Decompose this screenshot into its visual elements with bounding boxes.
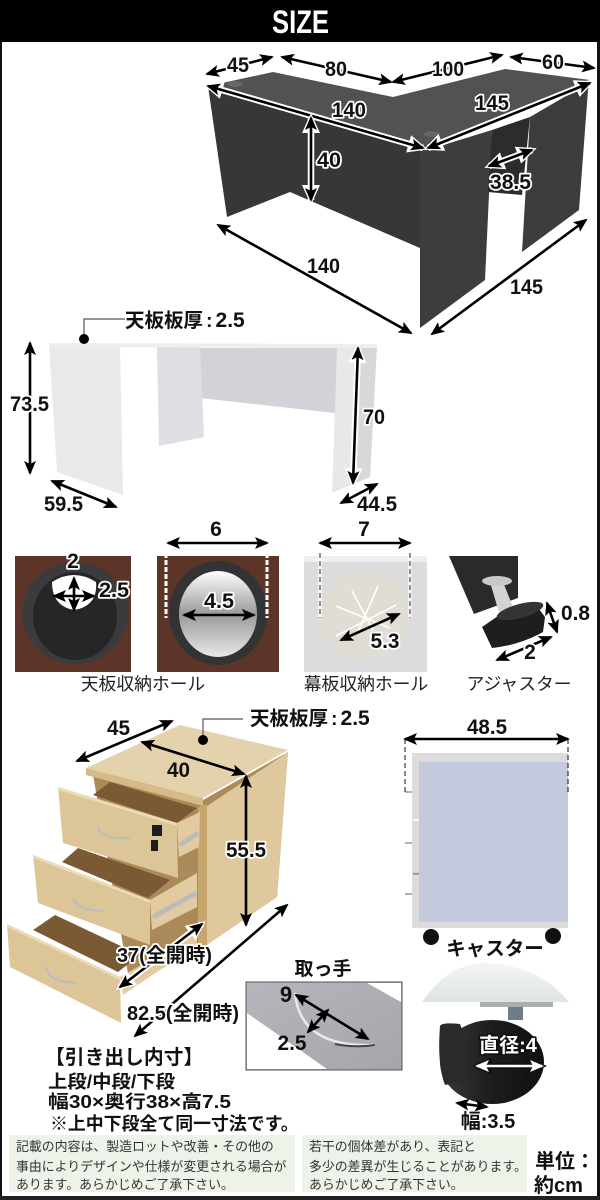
label: caster width 3.5: 幅:3.5 xyxy=(461,1110,515,1133)
dimension: modesty height 40: 40 xyxy=(317,149,341,172)
photo: cable grommet open xyxy=(157,518,279,672)
photo: adjuster foot xyxy=(449,556,590,664)
note: specification changes xyxy=(9,1135,295,1192)
washer and bolt xyxy=(490,582,515,616)
text block: drawer inner dimensions: 幅30×奥行38×高7.5 xyxy=(48,1092,231,1112)
callout: cabinet top thickness 2.5: 天板板厚:2.5 xyxy=(250,707,370,730)
dimension cross 2 and 2.5: 2.5 xyxy=(99,579,129,602)
desk front and legs xyxy=(208,82,590,328)
dimension: desk 100 xyxy=(393,55,502,82)
note: individual differences: 多少の差異が生じることがあります。 xyxy=(309,1159,527,1174)
desk top surface xyxy=(208,69,590,150)
dimension depth 2.5 xyxy=(278,1010,328,1055)
dimension: 44.5 xyxy=(341,484,397,516)
callout: desktop thickness 2.5 xyxy=(79,309,245,344)
drawer 2 xyxy=(33,848,197,945)
note: individual differences: あらかじめご了承下さい。 xyxy=(309,1177,464,1192)
lock lever xyxy=(439,1023,470,1085)
dimension: floor 145 xyxy=(432,220,586,334)
dimension width 7: 7 xyxy=(358,518,370,541)
dimension length 9: 9 xyxy=(280,982,292,1007)
panel: handle detail xyxy=(246,982,402,1070)
cabinet body xyxy=(93,752,288,985)
note: specification changes: 記載の内容は、製造ロットや改善・その他の xyxy=(16,1139,274,1154)
dimension: desk 60 xyxy=(511,51,594,74)
dimension diameter 4: 直径:4 xyxy=(479,1034,538,1057)
drawer 1 xyxy=(58,782,200,878)
dimension: inner height 70: 70 xyxy=(363,406,385,429)
foot pad xyxy=(482,605,545,648)
title bar: SIZE xyxy=(0,0,600,42)
text block: drawer inner dimensions: 上段/中段/下段 xyxy=(48,1072,175,1092)
panel: dark L-shaped desk xyxy=(208,69,590,328)
dimension: cabinet 45: 45 xyxy=(107,717,130,740)
dimension: 37 fully open: 37(全開時) xyxy=(117,944,212,967)
dimension width 7 xyxy=(320,518,410,618)
dimension width arrow xyxy=(457,1103,487,1107)
notch opening xyxy=(52,575,96,610)
dimension length 9 xyxy=(280,982,368,1039)
dimension: gap 38.5: 38.5 xyxy=(490,171,531,194)
slit lines xyxy=(336,586,396,636)
callout: desktop thickness 2.5: 天板板厚:2.5 xyxy=(125,309,245,332)
dimension hole 5.3: 5.3 xyxy=(370,630,400,653)
dimension depth 2.5: 2.5 xyxy=(278,1032,307,1055)
panel: white desk side view xyxy=(49,343,377,495)
note: specification changes: 事由によりデザインや仕様が変更される場合が xyxy=(16,1159,287,1174)
note: individual differences xyxy=(302,1135,527,1192)
dimension: floor 140: 140 xyxy=(307,255,340,278)
dimension: top edge 145: 145 xyxy=(475,92,509,115)
dimension: leg depth 59.5 xyxy=(44,481,116,516)
dimension: top edge 145 xyxy=(428,83,590,148)
note: individual differences: 若干の個体差があり、表記と xyxy=(309,1139,476,1154)
dimension: floor 140 xyxy=(218,225,411,333)
dimension: leg depth 59.5: 59.5 xyxy=(44,493,83,516)
label: adjuster: アジャスター xyxy=(466,674,572,694)
dimension 2: 2 xyxy=(524,641,536,664)
text block: drawer inner dimensions: ※上中下段全て同一寸法です。 xyxy=(50,1114,299,1134)
cable hole on top, left xyxy=(227,81,243,87)
label: modesty panel grommet: 幕板収納ホール xyxy=(304,674,428,694)
dimension width 6 xyxy=(166,518,267,618)
dimension: cabinet 40: 40 xyxy=(167,759,190,782)
photo: cable grommet closed xyxy=(15,550,131,672)
dimension width 6: 6 xyxy=(210,518,222,541)
dimension cross 2 and 2.5: 2 xyxy=(67,550,79,573)
cable hole on top, right xyxy=(424,131,440,137)
photo: caster xyxy=(422,963,569,1107)
dimension: cabinet 45 xyxy=(77,717,172,761)
dimension: desk depth 45: 45 xyxy=(227,54,249,77)
right leg xyxy=(332,346,377,493)
label: desktop grommet: 天板収納ホール xyxy=(81,674,205,694)
dimension hole 4.5 xyxy=(184,590,254,615)
label: unit approx cm: 単位： xyxy=(535,1150,595,1173)
text block: drawer inner dimensions: 【引き出し内寸】 xyxy=(45,1047,203,1069)
tabletop slab xyxy=(49,343,377,348)
dimension hole 4.5: 4.5 xyxy=(204,590,234,613)
dimension: cabinet 40 xyxy=(142,742,244,782)
dimension: height 73.5 xyxy=(10,343,49,473)
callout: cabinet top thickness 2.5 xyxy=(198,707,370,745)
dimension: desk 80: 80 xyxy=(325,58,347,81)
drawer 3 xyxy=(7,915,197,1023)
label: unit approx cm xyxy=(534,1150,595,1197)
panel: wooden three-drawer cabinet xyxy=(7,725,288,1023)
left leg xyxy=(49,347,123,495)
dimension hole 5.3 xyxy=(341,614,400,653)
text block: drawer inner dimensions xyxy=(45,1047,299,1134)
dimension: 37 fully open xyxy=(117,924,212,987)
dimension: inner height 70 xyxy=(353,348,385,483)
dimension 2 xyxy=(497,637,551,664)
back panel xyxy=(200,348,337,413)
dimension: desk 60: 60 xyxy=(542,51,564,74)
dimension: 44.5: 44.5 xyxy=(357,493,397,516)
label: unit approx cm: 約cm xyxy=(534,1174,583,1197)
dimension: height 73.5: 73.5 xyxy=(10,393,49,416)
drawer handles xyxy=(405,792,412,894)
heading: handle: 取っ手 xyxy=(294,958,352,980)
casters xyxy=(423,928,561,945)
dimension 0.8 xyxy=(547,602,590,632)
dimension: desk 80 xyxy=(282,57,391,82)
dimension: cabinet width 48.5: 48.5 xyxy=(467,716,507,739)
dimension: top edge 140: 140 xyxy=(332,99,366,122)
dimension cross 2 and 2.5 xyxy=(54,550,129,610)
cabinet top xyxy=(86,725,288,798)
title bar: SIZE: SIZE xyxy=(272,4,329,40)
photo: modesty panel grommet xyxy=(304,518,427,672)
panel: cabinet side view xyxy=(405,753,568,945)
dimension: 82.5 fully open: 82.5(全開時) xyxy=(127,1002,239,1025)
dimension: floor 145: 145 xyxy=(510,276,543,299)
dimension diameter 4 xyxy=(477,1034,542,1066)
note: specification changes: あります。あらかじめご了承下さい。 xyxy=(16,1177,234,1192)
handle curve xyxy=(295,993,375,1045)
dimension: modesty height 40 xyxy=(311,118,341,200)
dimension: 82.5 fully open xyxy=(127,905,287,1036)
dimension: desk depth 45 xyxy=(207,54,272,77)
dimension: cabinet height 55.5: 55.5 xyxy=(226,839,266,862)
dimension 0.8: 0.8 xyxy=(561,602,590,625)
dimension: desk 100: 100 xyxy=(432,58,464,81)
middle leg xyxy=(157,347,204,446)
dimension: gap 38.5 xyxy=(489,150,532,194)
heading: caster: キャスター xyxy=(446,938,544,960)
dimension: top edge 140 xyxy=(208,86,423,148)
